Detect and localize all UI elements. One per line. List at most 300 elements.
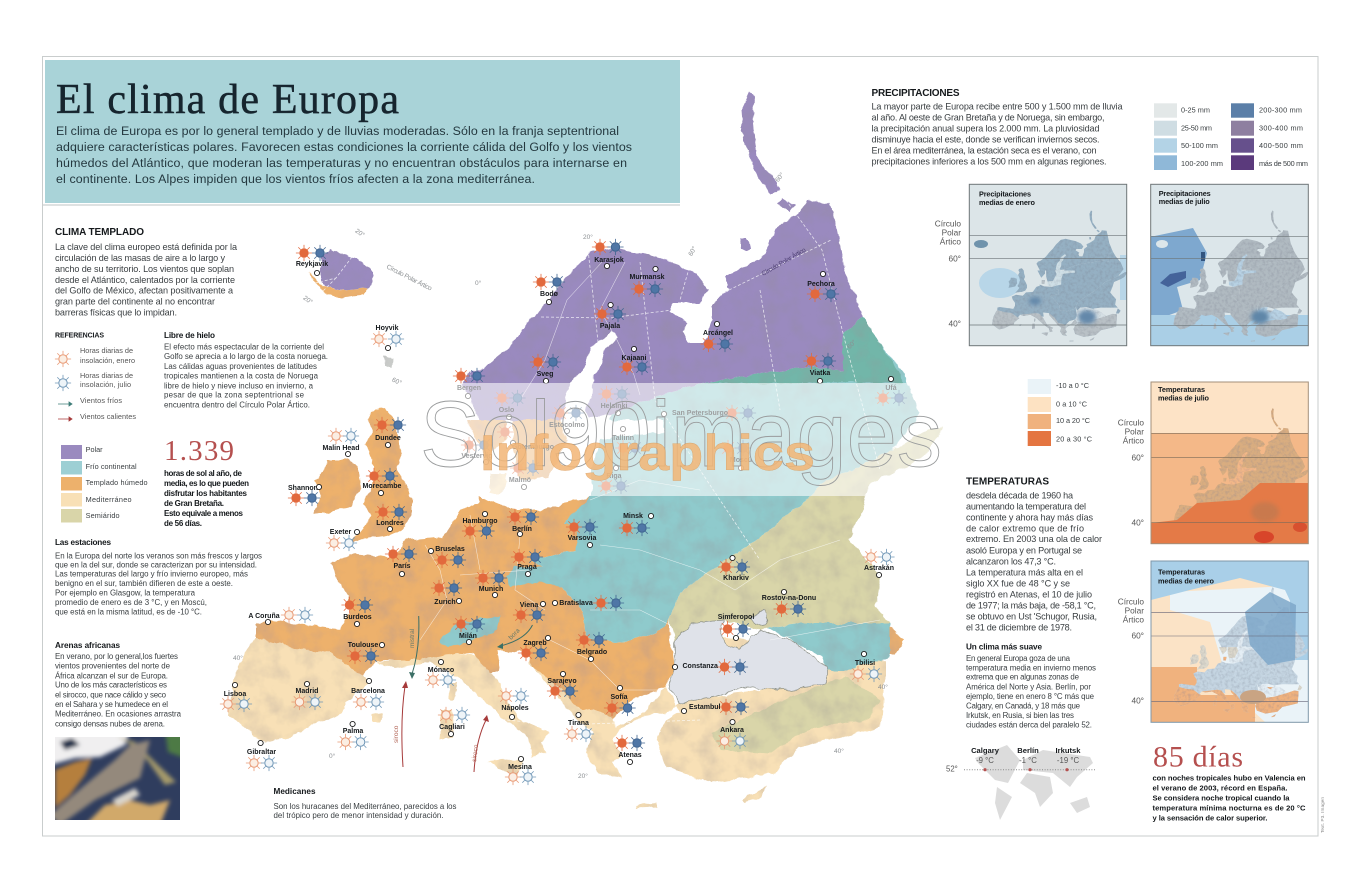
city: Astrakán (863, 549, 894, 578)
city: Zagreb (518, 635, 551, 661)
text block: precipitaciones (872, 88, 1123, 167)
legend: precipitation: 25-50 mm (1181, 124, 1212, 133)
text block: un clima más suave: ciudades están derca del paralelo 52. (966, 720, 1092, 729)
text block: las estaciones: Las temperaturas del largo y frío invierno europeo, más (55, 570, 248, 579)
legend: precipitation: 200-300 mm (1259, 106, 1302, 115)
city: Lisboa (220, 682, 252, 712)
city: Gotemburgo (497, 424, 554, 451)
map: July precipitation (1150, 184, 1310, 347)
text block: clima templado (55, 227, 238, 318)
arrow: mistral (409, 616, 419, 679)
city: Astrakán: Astrakán (864, 565, 894, 572)
map labels: July temperature latitudes: 60° (1131, 453, 1144, 463)
map labels: January precipitation latitudes: 60° (948, 254, 961, 264)
city: Bergen: Bergen (457, 385, 481, 392)
city: San Petersburgo: San Petersburgo (672, 410, 728, 417)
city: Murmansk (629, 266, 665, 297)
text block: temperaturas: La temperatura más alta en el (966, 567, 1083, 577)
city: Mónaco: Mónaco (428, 667, 454, 674)
text block: clima templado: circulación de las masas de aire a lo largo y (55, 253, 225, 263)
city: Dundee (374, 417, 406, 448)
city: Belgrado (576, 632, 607, 662)
city: Barcelona: Barcelona (351, 688, 385, 695)
city: Constanza (672, 659, 748, 675)
text block: un clima más suave: Irkutsk, en Rusia, si bien las tres (966, 711, 1074, 720)
legend: referencias: Horas diarias de (80, 346, 133, 355)
city: Tallinn: Tallinn (612, 435, 634, 442)
legend: referencias: Horas diarias de (80, 371, 133, 380)
map labels: January precipitation latitudes: Círculo (935, 219, 961, 229)
intro text: húmedos del Atlántico, que moderan las temperaturas y no encuentran obstáculos para internarse en (56, 156, 627, 170)
map labels: July temperature latitudes: 40° (1131, 518, 1144, 528)
graticule labels: 20° (302, 294, 315, 306)
city: Viatka (804, 353, 836, 384)
legend: referencias: REFERENCIAS (55, 333, 104, 340)
callout: 85 días: 85 días (1153, 741, 1243, 774)
legend: precipitation: 400-500 mm (1259, 141, 1303, 150)
legend: temperature: 10 a 20 °C (1056, 416, 1090, 425)
map: July precipitation: medias de julio (1159, 197, 1210, 206)
legend: referencias (55, 333, 136, 421)
seas (520, 331, 827, 703)
city: Mónaco (425, 659, 456, 688)
city: Malin Head (323, 428, 359, 457)
text block: libre de hielo: tropicales mantienen a la costa de Noruega (164, 371, 319, 380)
city: Simferopol (718, 614, 754, 641)
city: A Coruña (248, 607, 313, 625)
arrow: hot winds (58, 417, 72, 421)
text block: precipitaciones: la precipitación anual supera los 2.000 mm. La pluviosidad (872, 124, 1100, 134)
icon: january sun (55, 351, 71, 367)
text block: libre de hielo: Golfo se aprecia a lo largo de la costa noruega. (164, 352, 328, 361)
text block: arenas africanas: consigo densas nubes de arena. (55, 719, 165, 728)
callout: 1.339 hours of sun: media, es lo que pueden (164, 479, 249, 488)
city: Pajala (594, 302, 626, 330)
intro text (56, 124, 632, 186)
city: Tbilisi: Tbilisi (855, 660, 875, 667)
city: Tallinn (612, 426, 643, 456)
city: Kharkiv: Kharkiv (723, 575, 749, 582)
chart: world map along parallel 52: -1 °C (1019, 756, 1037, 765)
text block: libre de hielo (164, 331, 328, 409)
city: Zurich (431, 580, 462, 606)
text block: un clima más suave: Calgary, en Canadá, y 18 más que (966, 701, 1081, 710)
text block: medicanes (274, 787, 457, 820)
text block: precipitaciones: La mayor parte de Europa recibe entre 500 y 1.500 mm de lluvia (872, 101, 1123, 111)
city: Rostov-na-Donu: Rostov-na-Donu (762, 595, 816, 602)
city: Lisboa: Lisboa (224, 691, 246, 698)
legend: precipitation: 100-200 mm (1181, 159, 1223, 168)
graticule labels: 40° (878, 683, 888, 691)
city: Arcángel (701, 321, 733, 352)
text block: clima templado: CLIMA TEMPLADO (55, 227, 144, 238)
map: July temperature: Temperaturas (1158, 385, 1205, 394)
legend: climate zones: Polar (86, 445, 103, 454)
text block: las estaciones (55, 538, 262, 616)
city: Munich: Munich (479, 586, 503, 593)
graticule labels: 20° (354, 227, 367, 239)
city: Kharkiv (718, 555, 750, 582)
map: January temperature (1151, 561, 1310, 722)
chart: world map along parallel 52: Berlín (1017, 746, 1039, 755)
city: Varsovia: Varsovia (568, 535, 597, 542)
sea: Baltic (520, 331, 665, 510)
arrow: siroco east (471, 715, 489, 772)
credit: Text. P3. Imagen (1320, 797, 1325, 833)
callout: 85 días: con noches tropicales hubo en Valencia en (1152, 774, 1306, 783)
text block: precipitaciones: PRECIPITACIONES (872, 88, 960, 99)
callout: 85 días (1152, 741, 1306, 823)
city: Tirana (564, 712, 594, 742)
callout: 85 días: y la sensación de calor superior. (1152, 814, 1268, 823)
intro text: El clima de Europa es por lo general templado y de lluvias moderadas. Sólo en la franja septentrional (56, 124, 619, 138)
city: Atenas (614, 735, 645, 765)
city: Helsinki (599, 386, 630, 416)
city: Palma: Palma (343, 728, 363, 735)
text block: precipitaciones: disminuye hacia el este, donde se verifican inviernos secos. (872, 135, 1100, 145)
text block: arenas africanas: Uno de los más característicos es (55, 681, 167, 690)
city: Viena: Viena (520, 602, 538, 609)
map: January precipitation: medias de enero (979, 198, 1036, 207)
city: Gotemburgo: Gotemburgo (512, 444, 554, 451)
city: Exeter (326, 529, 360, 551)
callout: 85 días: temperatura mínima nocturna es de 20 °C (1152, 804, 1306, 813)
city: Oslo: Oslo (499, 407, 514, 414)
city: Karasjok (592, 239, 624, 269)
legend: precipitation: 300-400 mm (1259, 124, 1303, 133)
text block: clima templado: desde el Atlántico, calentados por la corriente (55, 275, 235, 285)
city: Ufa (875, 376, 907, 406)
city: Estocolmo (549, 405, 585, 434)
map: January precipitation (969, 184, 1128, 346)
text block: temperaturas: aumentando la temperatura del (966, 501, 1086, 511)
city: Sveg (530, 354, 561, 384)
text block: temperaturas: el 31 de diciembre de 1978. (966, 622, 1072, 632)
watermark: Sol90images (420, 382, 942, 486)
parallel line (964, 769, 1096, 771)
callout: 1.339 hours of sun: de Gran Bretaña. (164, 499, 224, 508)
graticule labels: 40° (233, 654, 243, 662)
arrow: cold winds (58, 402, 72, 406)
city: Varsovia (566, 519, 598, 548)
city: Gibraltar: Gibraltar (247, 749, 276, 756)
city: Palma (338, 721, 368, 750)
land zones (228, 92, 943, 808)
city: Toulouse (347, 642, 385, 664)
text block: un clima más suave (966, 642, 1096, 729)
city: Simferopol: Simferopol (718, 614, 754, 621)
callout: 85 días: el verano de 2003, récord en España. (1152, 784, 1288, 793)
graticule labels: 20° (578, 772, 588, 780)
callout: 1.339 hours of sun: Esto equivale a menos (164, 509, 244, 518)
city: Zurich: Zurich (434, 599, 456, 606)
arrow: siroco west: siroco (393, 725, 400, 743)
panel: title banner (43, 60, 680, 205)
text block: arenas africanas (55, 641, 182, 728)
graticule labels: 60° (391, 376, 403, 387)
chart: world map along parallel 52: -19 °C (1057, 756, 1079, 765)
city: París (385, 546, 417, 577)
text block: clima templado: La clave del clima europeo está definida por la (55, 242, 238, 252)
legend: temperature: 20 a 30 °C (1056, 435, 1092, 444)
legend: temperature: -10 a 0 °C (1056, 381, 1089, 390)
city: Constanza: Constanza (682, 663, 718, 670)
city: Morecambe (363, 468, 402, 496)
city: Sarajevo (547, 671, 578, 699)
text block: un clima más suave: ejemplo, tiene en enero 8 °C más que (966, 692, 1095, 701)
city: Reykjavik (296, 245, 328, 276)
city: Nápoles (498, 688, 529, 720)
text block: libre de hielo: encuentra dentro del Círculo Polar Ártico. (164, 400, 310, 409)
text block: medicanes: Medicanes (274, 787, 316, 796)
arrow: bora (497, 625, 532, 649)
city: Moscú (720, 440, 752, 471)
city: Vestervig: Vestervig (461, 453, 493, 460)
graticule labels: 60° (687, 245, 699, 257)
map: July temperature (1151, 382, 1309, 544)
city: Mesina: Mesina (508, 764, 532, 771)
arrow: mistral: mistral (409, 628, 416, 648)
text block: temperaturas: extremo. En 2003 una ola de calor (966, 534, 1102, 544)
city: Londres: Londres (376, 520, 404, 527)
text block: temperaturas: asoló Europa y en Portugal se (966, 545, 1082, 555)
map labels: January temperature latitudes: 40° (1131, 695, 1144, 705)
map: January precipitation: Precipitaciones (979, 190, 1031, 199)
map labels: January temperature latitudes: Polar (1125, 606, 1144, 616)
city: Milán (453, 616, 485, 645)
graticule labels: 20° (583, 233, 593, 241)
zone: semi-arid (669, 427, 943, 753)
city: Atenas: Atenas (618, 752, 642, 759)
text block: clima templado: ancho de su territorio. Los vientos que soplan (55, 264, 234, 274)
city: Madrid: Madrid (296, 688, 318, 695)
city: Hoyvik (371, 325, 404, 351)
city: Berlín (507, 509, 539, 537)
map labels: January precipitation latitudes: Polar (942, 228, 961, 238)
text block: precipitaciones: En el área mediterránea, la estación seca es el verano, con (872, 146, 1096, 156)
arrow: siroco east: siroco (471, 744, 480, 762)
city: Bratislava (552, 595, 624, 611)
map labels: July temperature latitudes: Polar (1125, 427, 1144, 437)
text block: arenas africanas: el sirocco, que nace cálido y seco (55, 691, 167, 700)
text block: libre de hielo: Las cálidas aguas provenientes de latitudes (164, 362, 317, 371)
legend: referencias: Vientos calientes (80, 412, 136, 421)
text block: temperaturas: de 1977; la más baja, de -58,1 °C, (966, 600, 1096, 610)
legend: temperature (1028, 379, 1092, 446)
map labels: January precipitation latitudes (935, 219, 961, 329)
city: Sofía: Sofía (610, 694, 628, 701)
city: Madrid (292, 681, 323, 710)
text block: temperaturas: registró en Atenas, el 10 de julio (966, 589, 1092, 599)
city: Moscú: Moscú (730, 457, 752, 464)
text block: precipitaciones: al año. Al oeste de Gran Bretaña y de Noruega, sin embargo, (872, 113, 1104, 123)
city: Bergen (453, 368, 485, 399)
text block: un clima más suave: América del Norte y Asia. Berlín, por (966, 682, 1091, 691)
city: Vestervig (461, 437, 493, 465)
text block: arenas africanas: África alcanzan el sur de Europa. (55, 671, 168, 680)
legend: climate zones: Mediterráneo (86, 495, 132, 504)
city: Ankara: Ankara (720, 727, 744, 734)
city: Malmö: Malmö (509, 477, 531, 484)
text block: las estaciones: que en la del sur, donde se caracterizan por su intensidad. (55, 560, 257, 569)
city: Murmansk: Murmansk (629, 274, 665, 281)
city: Shannon (288, 484, 322, 506)
map labels: July temperature latitudes (1118, 418, 1144, 528)
legend: temperature: 0 a 10 °C (1056, 400, 1087, 409)
city: Tirana: Tirana (568, 720, 589, 727)
map: January temperature: Temperaturas (1158, 567, 1205, 576)
city: Praga: Praga (517, 564, 537, 571)
legend: climate zones: Frío continental (86, 462, 137, 471)
graticule labels: 60° (773, 171, 786, 184)
city: Pajala: Pajala (600, 323, 620, 330)
cities (220, 239, 907, 785)
city: Bruselas (428, 546, 466, 568)
text block: las estaciones: promedio de enero es de 3 °C, y en Moscú, (55, 598, 207, 607)
city: Malmö (509, 460, 541, 490)
map labels: January temperature latitudes: Círculo (1118, 597, 1144, 607)
legend: climate zones (61, 445, 148, 522)
wind arrows (393, 616, 532, 772)
icon: july sun (55, 375, 71, 391)
city: Estambul (681, 699, 749, 715)
zone: mediterranean (228, 473, 885, 808)
text block: las estaciones: Las estaciones (55, 538, 111, 547)
city: Rostov-na-Donu (762, 589, 816, 617)
map labels: January temperature latitudes: 60° (1131, 630, 1144, 640)
legend: referencias: Vientos fríos (80, 396, 122, 405)
city: Gibraltar (246, 740, 277, 771)
city: Nápoles: Nápoles (501, 705, 529, 712)
text block: un clima más suave: extrema que en algunas zonas de (966, 673, 1080, 682)
city: Ufa: Ufá (885, 385, 897, 392)
arrow: siroco west (393, 681, 408, 767)
city: Mesina (505, 756, 536, 785)
map: July temperature: medias de julio (1158, 394, 1210, 403)
city: Milán: Milán (459, 633, 477, 640)
text block: clima templado: gran parte del continente al no encontrar (55, 297, 215, 307)
text block: temperaturas: se obtuvo en Ust 'Schugor, Rusia, (966, 611, 1097, 621)
graticule labels: 40° (834, 747, 844, 755)
city: Burdeos: Burdeos (343, 614, 372, 621)
text block: clima templado: del Golfo de México, afectan positivamente a (55, 286, 234, 296)
text block: arenas africanas: vientos provenientes del norte de (55, 661, 171, 670)
city: Kajaani (619, 346, 650, 375)
text block: las estaciones: benigno en el sur, también difieren de este a oeste. (55, 579, 233, 588)
text block: un clima más suave: temperatura media en invierno menos (966, 663, 1096, 672)
map: climate zones of Europe (220, 92, 943, 808)
city: Pechora (807, 271, 839, 302)
graticule labels: 0° (475, 279, 482, 287)
city: Arcángel: Arcángel (703, 330, 733, 337)
text block: libre de hielo: pesar de que la zona septentrional se (164, 391, 305, 400)
legend: referencias: insolación, enero (80, 356, 135, 365)
graticule labels: Círculo Polar Ártico (385, 262, 434, 293)
city: Bruselas: Bruselas (435, 546, 465, 553)
city: Estocolmo: Estocolmo (549, 422, 585, 429)
city: Berlín: Berlín (512, 526, 532, 533)
city: Sveg: Sveg (537, 371, 553, 378)
callout: 1.339 hours of sun (164, 435, 249, 528)
photo: satellite view of Saharan dust (55, 737, 180, 820)
map labels: January temperature latitudes (1118, 597, 1144, 705)
title: El clima de Europa (56, 77, 399, 123)
city: Tbilisi (850, 651, 882, 682)
city: Hoyvik: Hoyvik (376, 325, 399, 332)
text block: medicanes: del trópico pero de menor intensidad y duración. (274, 811, 444, 820)
callout: 1.339 hours of sun: de 56 días. (164, 519, 202, 528)
text block: temperaturas: alcanzaron los 47,3 °C. (966, 556, 1056, 566)
text block: las estaciones: En la Europa del norte los veranos son más frescos y largos (55, 551, 262, 560)
city: Zagreb: Zagreb (523, 640, 547, 647)
continents (975, 745, 1093, 820)
legend: climate zones: Templado húmedo (86, 478, 148, 487)
text block: temperaturas: TEMPERATURAS (966, 477, 1049, 488)
map: July precipitation: Precipitaciones (1159, 189, 1211, 198)
city: Dundee: Dundee (375, 435, 401, 442)
legend: precipitation: más de 500 mm (1259, 159, 1308, 168)
chart: world map along parallel 52 (946, 745, 1096, 820)
city: Belgrado: Belgrado (577, 649, 607, 656)
intro text: adquiere características polares. Favorecen estas condiciones la corriente cálida del Golfo y los vientos (56, 140, 632, 154)
graticule labels (233, 171, 888, 780)
city: París: París (393, 563, 411, 570)
legend: climate zones: Semiárido (86, 511, 120, 520)
city: Hamburgo: Hamburgo (462, 518, 498, 525)
city: Riga: Riga (606, 473, 622, 480)
text block: arenas africanas: Mediterráneo. En ocasiones arrastra (55, 709, 182, 718)
map labels: July temperature latitudes: Círculo (1118, 418, 1144, 428)
city: San Petersburgo (661, 405, 756, 421)
chart: world map along parallel 52: Calgary (971, 746, 1000, 755)
city: Pechora: Pechora (807, 281, 835, 288)
text block: temperaturas: desdela década de 1960 ha (966, 490, 1074, 500)
text block: temperaturas: de calor extremo que de frío (966, 523, 1084, 533)
text block: un clima más suave: En general Europa goza de una (966, 654, 1071, 663)
text block: clima templado: barreras físicas que lo impidan. (55, 308, 177, 318)
city: Estambul: Estambul (689, 704, 721, 711)
city: Helsinki: Helsinki (601, 403, 627, 410)
city: Oslo (494, 390, 525, 420)
text block: las estaciones: Por ejemplo en Glasgow, la temperatura (55, 589, 196, 598)
city: Hamburgo (462, 511, 498, 539)
city: Cagliari: Cagliari (439, 724, 465, 731)
city: Exeter: Exeter (330, 529, 351, 536)
map labels: July temperature latitudes: Ártico (1123, 436, 1144, 446)
text block: arenas africanas: en el Sahara y se humedece en el (55, 700, 168, 709)
city: Cagliari (438, 707, 470, 737)
text block: libre de hielo: libre de hielo y nieve incluso en invierno, a (164, 381, 314, 390)
text block: arenas africanas: Arenas africanas (55, 641, 120, 650)
callout: 1.339 hours of sun: 1.339 (164, 435, 234, 467)
watermark: Infographics (480, 425, 815, 481)
city: Bodø (533, 274, 565, 305)
arrow: bora: bora (507, 627, 522, 641)
graticule labels: Círculo Polar Ártico (760, 245, 808, 278)
city: Reykjavik: Reykjavik (296, 261, 328, 268)
callout: 1.339 hours of sun: horas de sol al año, de (164, 469, 243, 478)
city: Viena (513, 601, 546, 623)
zone: polar (321, 92, 864, 420)
city: Minsk (619, 513, 654, 536)
city: Morecambe: Morecambe (363, 483, 402, 490)
legend: precipitation (1154, 103, 1308, 170)
city: Minsk: Minsk (623, 513, 643, 520)
chart: world map along parallel 52: Irkutsk (1056, 746, 1081, 755)
zone: cold continental (439, 317, 920, 670)
chart: world map along parallel 52: 52° (946, 765, 958, 774)
graticule labels: 60° (845, 338, 858, 351)
